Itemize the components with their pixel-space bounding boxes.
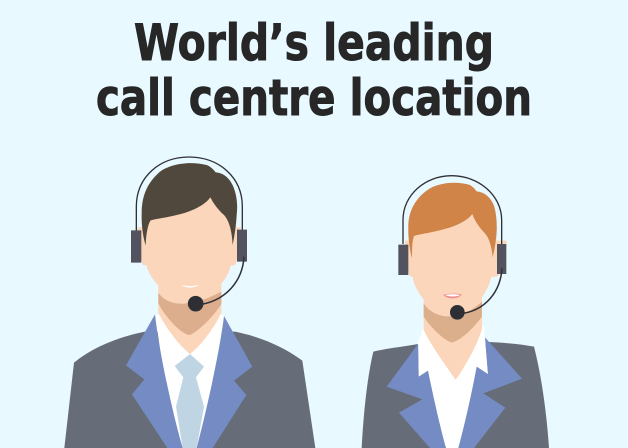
man: jacket [64,332,315,448]
woman: hair [408,183,497,258]
woman: microphone boom [458,268,502,314]
woman: jacket [362,342,549,448]
man: neck [158,283,221,354]
man: tie [175,354,204,448]
woman: neck [424,297,482,380]
title: call centre location [96,69,532,127]
woman: left lapel [387,344,446,448]
man: ears [137,227,241,266]
woman: shirt base [419,327,488,448]
man: face [142,190,237,300]
woman: ears [405,241,507,277]
man: microphone [188,296,203,311]
woman: face [408,207,497,315]
woman: right lapel [458,337,522,448]
woman: earpieces [398,244,506,275]
title: World’s leading [134,14,494,72]
man: right lapel [197,316,252,448]
woman: microphone [450,305,465,320]
woman: left collar [418,329,456,448]
male call centre agent [64,157,315,448]
man: microphone boom [197,257,244,305]
woman: headband [403,176,502,244]
man: mouth [181,285,199,287]
woman: neck shadow [424,302,482,343]
woman: lips [443,294,462,298]
man: headband [136,157,242,231]
female call centre agent [362,176,549,448]
man: hair [142,163,237,246]
man: earpieces [131,230,247,263]
title [96,14,532,127]
man: shirt [155,315,224,448]
man: left lapel [126,314,183,448]
man: neck shadow [158,292,221,335]
woman: right collar [456,327,488,448]
